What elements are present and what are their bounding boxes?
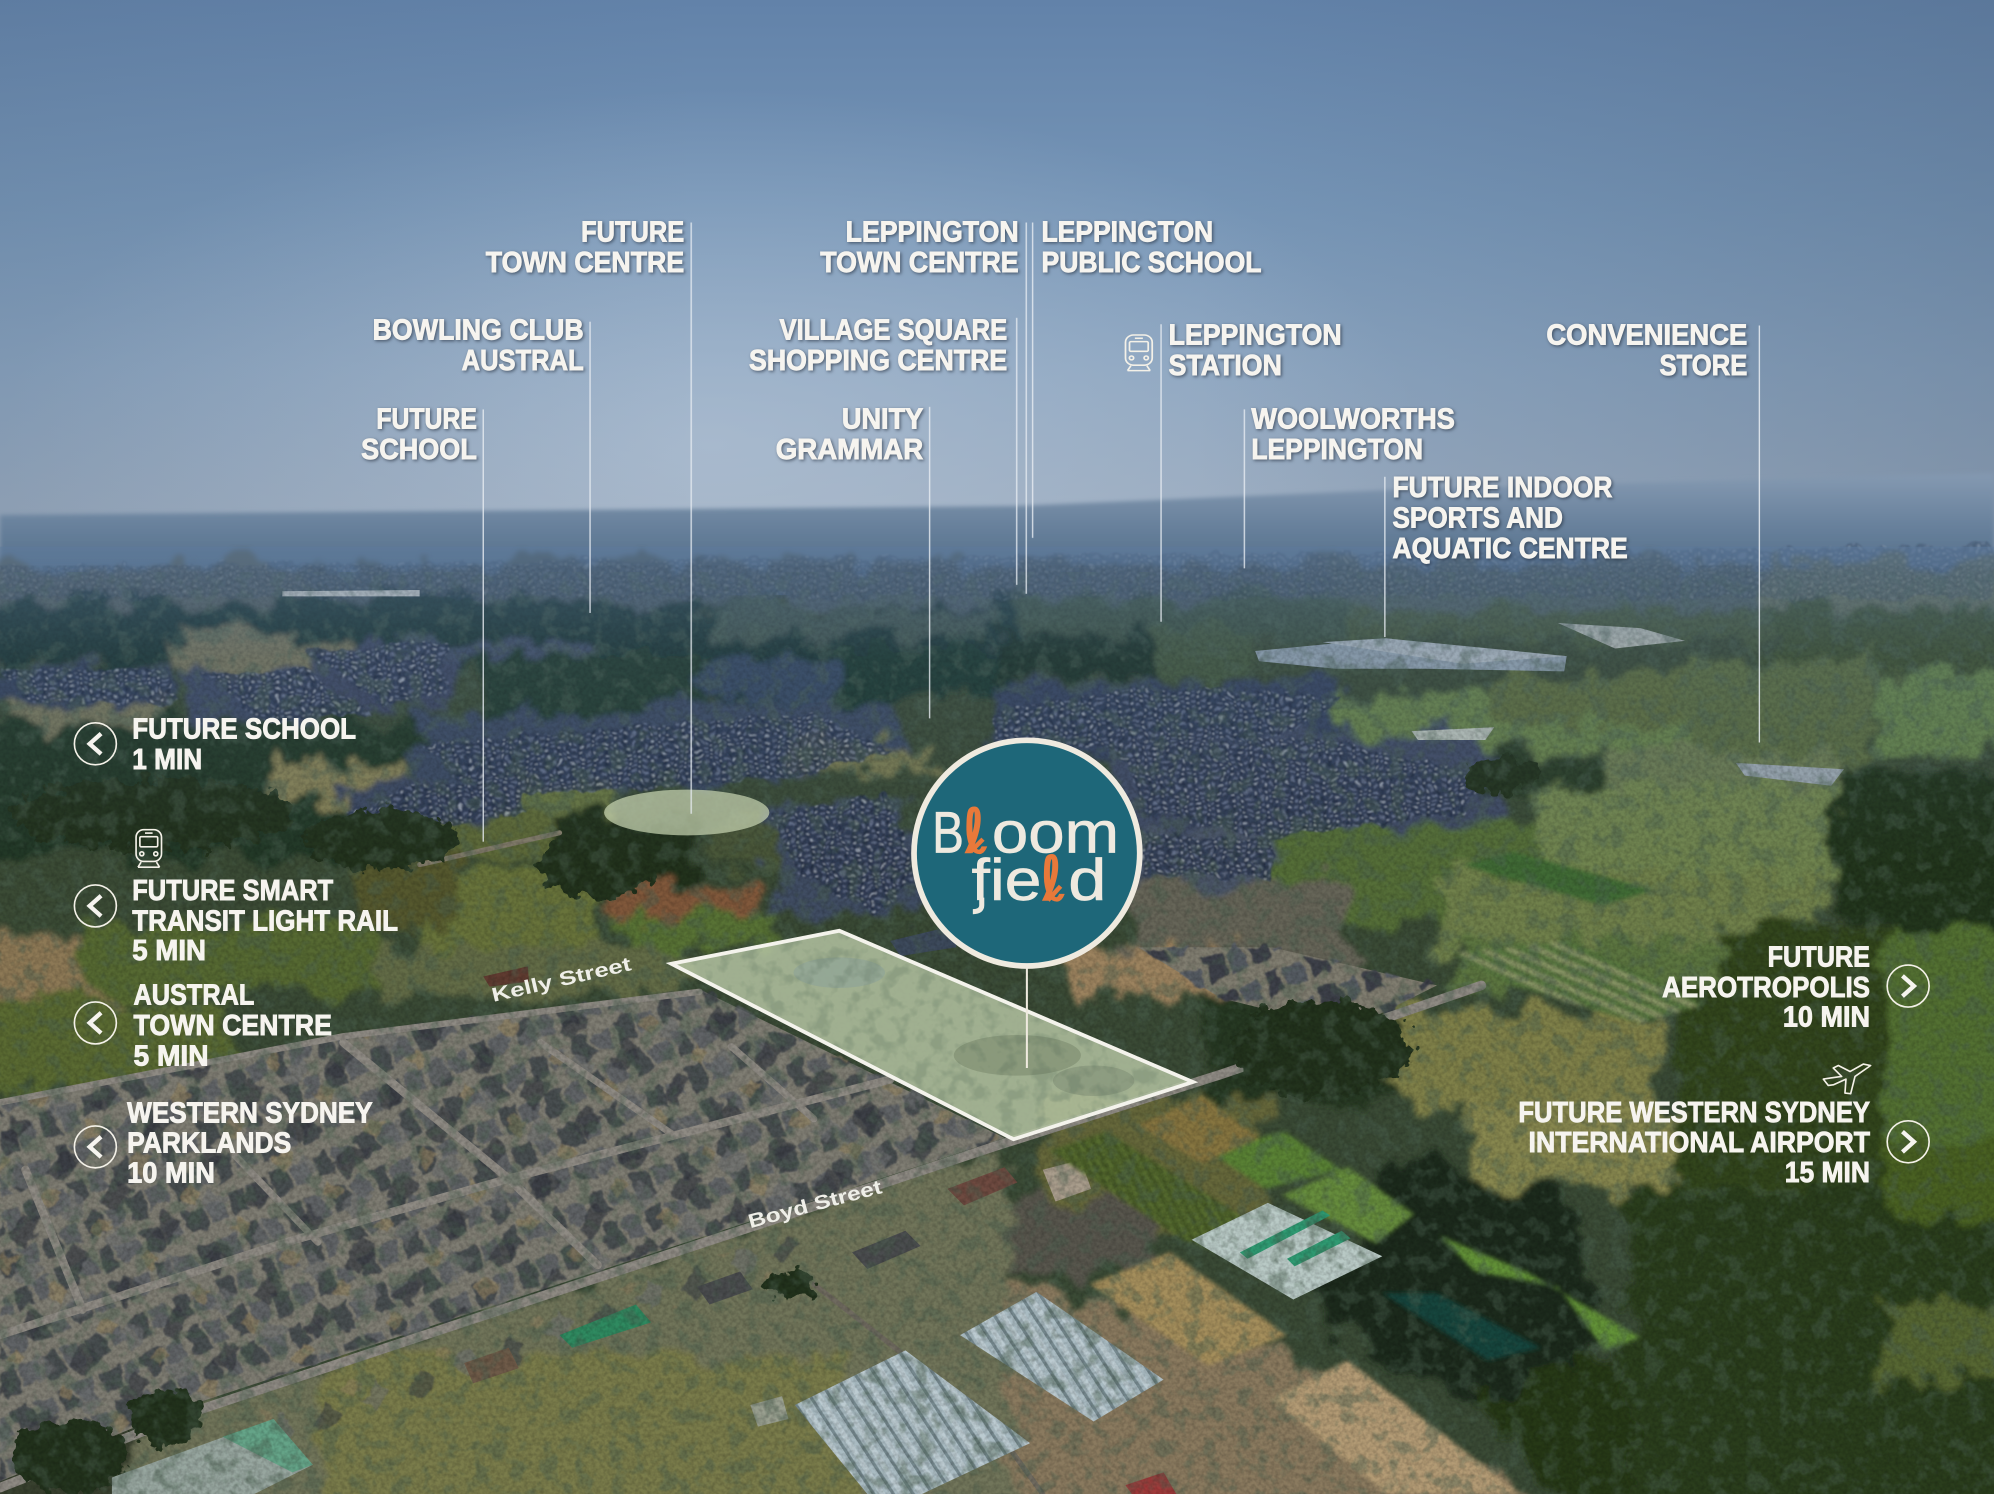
street name: Kelly Street: Kelly Street [490, 953, 634, 1007]
woodland mottling [0, 572, 1994, 1494]
label: Future School: SCHOOL [361, 434, 477, 466]
label: Leppington Public School [1042, 217, 1262, 279]
tree clusters [13, 758, 1539, 1494]
label: Leppington Public School: LEPPINGTON [1042, 217, 1213, 249]
callout: Austral Town Centre 5 min: TOWN CENTRE [134, 1010, 332, 1042]
near suburb street blocks [0, 947, 1437, 1481]
travel time labels: west [127, 714, 398, 1189]
label: Future Indoor Sports and Aquatic Centre: AQUATIC CENTRE [1392, 533, 1628, 565]
logo wordmark: ℓ [954, 796, 995, 867]
callout: Austral Town Centre 5 min: 5 MIN [134, 1041, 209, 1073]
label: Leppington Public School: PUBLIC SCHOOL [1042, 247, 1262, 279]
label: Future Indoor Sports and Aquatic Centre: FUTURE INDOOR [1392, 472, 1613, 504]
near suburbs houses [0, 947, 1437, 1481]
icon: light rail train [136, 830, 162, 867]
label: Village Square Shopping Centre: SHOPPING CENTRE [749, 345, 1007, 377]
callout: Future Aerotropolis 10 min: 10 MIN [1783, 1002, 1870, 1034]
callout: Austral Town Centre 5 min: AUSTRAL [134, 979, 254, 1011]
logo wordmark [932, 796, 1119, 915]
labels over the sky: destinations [361, 217, 1747, 565]
label: Bowling Club Austral [373, 314, 584, 377]
callout: Future Aerotropolis 10 min [1662, 941, 1870, 1034]
logo wordmark: fie [972, 848, 1042, 913]
label: Future School [361, 403, 477, 466]
arrow buttons: east [1887, 965, 1929, 1163]
callout: Future Aerotropolis 10 min: FUTURE [1768, 941, 1870, 973]
far suburbs texture [0, 547, 1994, 915]
label: Woolworths Leppington: WOOLWORTHS [1251, 403, 1455, 435]
label: Leppington Station: STATION [1169, 350, 1282, 382]
label: Unity Grammar: GRAMMAR [776, 434, 923, 466]
callout: Future Smart Transit Light Rail 5 min: FUTURE SMART [132, 875, 334, 907]
label: Convenience Store [1546, 320, 1747, 382]
callout: Austral Town Centre 5 min [134, 979, 332, 1073]
arrow: Future Aerotropolis [1887, 965, 1929, 1007]
callout: Future Western Sydney International Airport 15 min: FUTURE WESTERN SYDNEY [1518, 1097, 1870, 1129]
label: Bowling Club Austral: BOWLING CLUB [373, 314, 584, 346]
street name: Boyd Street: Boyd Street [746, 1176, 885, 1233]
label: Unity Grammar [776, 403, 923, 466]
logo pin stem [1026, 966, 1028, 1068]
label: Future Indoor Sports and Aquatic Centre: SPORTS AND [1392, 503, 1563, 535]
base ground [0, 595, 1994, 1494]
callout: Future School 1 min [132, 714, 356, 776]
logo wordmark: d [1068, 848, 1106, 913]
label: Convenience Store: STORE [1660, 350, 1747, 382]
arrow: Future School [74, 723, 116, 765]
arrow: Future Western Sydney International Airport [1887, 1121, 1929, 1163]
callout: Future Western Sydney International Airport 15 min [1518, 1097, 1870, 1189]
arrow: Future Smart Transit Light Rail [74, 885, 116, 927]
label: Leppington Station [1169, 320, 1342, 382]
label: Convenience Store: CONVENIENCE [1546, 320, 1747, 352]
logo wordmark: oom [992, 800, 1119, 865]
callout: Future Western Sydney International Airport 15 min: 15 MIN [1785, 1157, 1870, 1189]
pale oval site highlight [604, 790, 769, 835]
callout: Future Western Sydney International Airport 15 min: INTERNATIONAL AIRPORT [1529, 1127, 1870, 1159]
callout: Western Sydney Parklands 10 min: 10 MIN [127, 1157, 215, 1189]
callout: Future Smart Transit Light Rail 5 min: TRANSIT LIGHT RAIL [132, 906, 398, 938]
roads [0, 833, 1482, 1494]
label: Leppington Town Centre: LEPPINGTON [846, 217, 1019, 249]
label: Woolworths Leppington [1251, 403, 1455, 466]
label: Village Square Shopping Centre [749, 314, 1007, 377]
callout: Future School 1 min: 1 MIN [132, 744, 202, 776]
Bloomfield logo badge [911, 737, 1143, 969]
label: Leppington Town Centre [820, 217, 1019, 279]
label: Future Indoor Sports and Aquatic Centre [1392, 472, 1628, 565]
buildings with coloured roofs [483, 926, 1176, 1494]
farm plots [1049, 852, 1704, 1494]
callout: Future Smart Transit Light Rail 5 min [132, 875, 398, 967]
ground texture grain [0, 566, 1994, 1494]
greenhouses [112, 590, 1844, 1494]
icon: airplane [1823, 1064, 1871, 1094]
callout: Future School 1 min: FUTURE SCHOOL [132, 714, 356, 746]
arrow: Austral Town Centre [74, 1002, 116, 1044]
label: Bowling Club Austral: AUSTRAL [462, 345, 584, 377]
callout: Western Sydney Parklands 10 min: WESTERN SYDNEY [127, 1098, 373, 1130]
callout: Western Sydney Parklands 10 min: PARKLANDS [127, 1128, 291, 1160]
arrow: Western Sydney Parklands [74, 1126, 116, 1168]
label: Woolworths Leppington: LEPPINGTON [1251, 434, 1423, 466]
sky [0, 0, 1994, 598]
arrow buttons: west [74, 723, 116, 1168]
ground base colour blocks [0, 562, 1994, 1494]
label: Future School: FUTURE [376, 403, 477, 435]
label: Future Town Centre: TOWN CENTRE [486, 247, 684, 279]
label: Unity Grammar: UNITY [842, 403, 923, 435]
leader lines [483, 223, 1759, 842]
hazy horizon band [0, 473, 1994, 610]
Bloomfield site boundary [671, 931, 1193, 1139]
label: Leppington Station: LEPPINGTON [1169, 320, 1342, 352]
bungalows and sheds south of Boyd Street [464, 1160, 1091, 1427]
callout: Future Smart Transit Light Rail 5 min: 5 MIN [132, 935, 206, 967]
label: Future Town Centre [486, 217, 684, 279]
logo wordmark: ℓ [1031, 844, 1072, 915]
icon: train at Leppington Station [1126, 335, 1152, 371]
label: Future Town Centre: FUTURE [581, 217, 684, 249]
callout: Future Aerotropolis 10 min: AEROTROPOLIS [1662, 972, 1870, 1004]
callout: Western Sydney Parklands 10 min [127, 1098, 373, 1189]
logo wordmark: B [932, 800, 964, 865]
travel time labels: east [1518, 941, 1870, 1189]
label: Village Square Shopping Centre: VILLAGE SQUARE [780, 314, 1007, 346]
label: Leppington Town Centre: TOWN CENTRE [820, 247, 1019, 279]
atmospheric haze over distant land [0, 547, 1994, 865]
